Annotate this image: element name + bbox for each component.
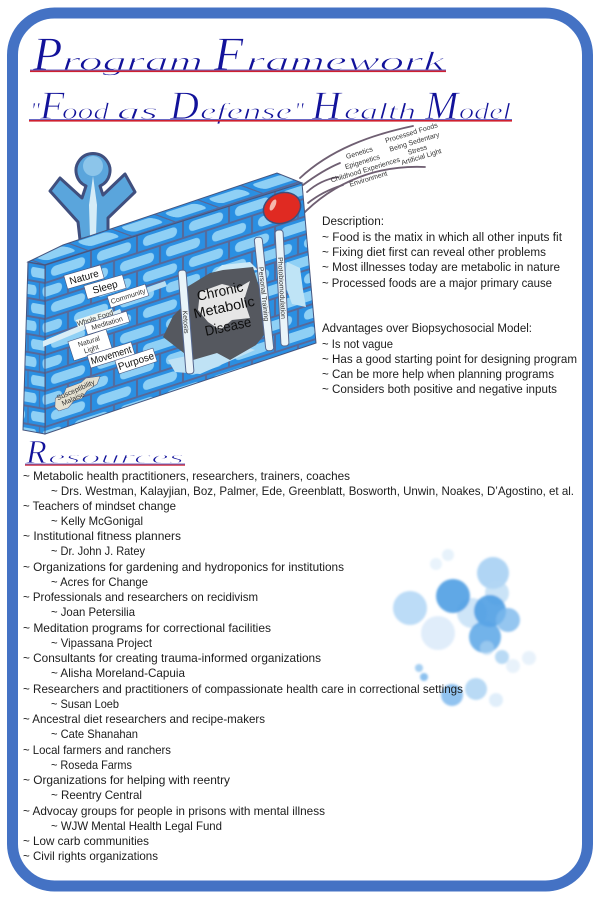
- text block: description: ~ Fixing diet first can reveal other problems: [322, 245, 546, 259]
- brick: Natural Light: [68, 329, 112, 361]
- brick: Whole Food: Whole Food: [76, 310, 114, 328]
- text block: resources list: ~ Teachers of mindset change: [23, 499, 176, 513]
- negative input labels: Childhood Experiences: [330, 157, 401, 184]
- bar: Photobiomodulation: Photobiomodulation: [276, 257, 286, 319]
- brick: Sleep: Sleep: [91, 279, 120, 297]
- title: Program Framework: [30, 28, 446, 81]
- brick: Meditation: [84, 311, 130, 335]
- text block: resources list: ~ Acres for Change: [51, 575, 148, 589]
- text block: resources list: ~ WJW Mental Health Legal Fund: [51, 819, 222, 833]
- label: Chronic Metabolic Disease: Chronic: [195, 278, 245, 304]
- heading: Resources: esources: [48, 448, 185, 467]
- brick: Community: [107, 284, 149, 308]
- text block: description: [322, 214, 563, 290]
- negative input labels: Stress: [407, 144, 429, 157]
- heading: Food as Defense Health Model: odel: [459, 99, 511, 124]
- heading: Food as Defense Health Model: D: [169, 83, 199, 128]
- text block: resources list: [23, 469, 574, 863]
- text block: resources list: ~ Vipassana Project: [51, 636, 153, 650]
- bar: Personal Training: [254, 237, 274, 351]
- text block: resources list: ~ Cate Shanahan: [51, 727, 138, 741]
- text block: advantages: Advantages over Biopsychosocial Model:: [322, 321, 532, 335]
- text block: description: ~ Processed foods are a major primary cause: [322, 276, 552, 290]
- text block: resources list: ~ Kelly McGonigal: [51, 514, 143, 528]
- title: Program Framework: ramework: [246, 47, 446, 76]
- text block: description: ~ Food is the matix in which all other inputs fit: [322, 230, 563, 244]
- bar: Photobiomodulation: [274, 230, 289, 346]
- heading: Food as Defense Health Model: efense: [200, 99, 292, 124]
- brick: Community: Community: [110, 288, 147, 306]
- brick: Movement: Movement: [90, 344, 133, 367]
- negative input labels: Artificial Light: [401, 148, 443, 167]
- brick: Meditation: Meditation: [91, 316, 124, 332]
- text block: description: Description:: [322, 214, 384, 228]
- text block: resources list: ~ Meditation programs for correctional facilities: [23, 621, 271, 635]
- text block: resources list: ~ Roseda Farms: [51, 758, 132, 772]
- patch: Susceptibility Malaise: [49, 372, 107, 413]
- text block: resources list: ~ Researchers and practitioners of compassionate health care in correctional settings: [23, 682, 463, 696]
- bar: Personal Training: Personal Training: [257, 267, 269, 322]
- text block: resources list: ~ Organizations for gardening and hydroponics for institutions: [23, 560, 344, 574]
- heading: Food as Defense Health Model: ": [294, 99, 305, 125]
- text block: resources list: ~ Institutional fitness planners: [23, 529, 181, 543]
- label: Chronic Metabolic Disease: Metabolic: [192, 293, 256, 321]
- text block: resources list: ~ Metabolic health practitioners, researchers, trainers, coaches: [23, 469, 350, 483]
- title: Program Framework: F: [213, 28, 244, 81]
- heading: Food as Defense Health Model: ealth: [344, 99, 416, 124]
- text block: resources list: ~ Organizations for helping with reentry: [23, 773, 230, 787]
- text block: resources list: ~ Alisha Moreland-Capuia: [51, 666, 185, 680]
- heading: Resources: R: [25, 434, 47, 471]
- wall lines: negative inputs: [300, 126, 425, 217]
- text block: resources list: ~ Local farmers and ranchers: [23, 743, 171, 757]
- negative input labels: Epigenetics: [344, 154, 381, 171]
- patch: Susceptibility Malaise: Susceptibility: [56, 379, 97, 402]
- label: Chronic Metabolic Disease: Disease: [203, 313, 253, 339]
- text block: resources list: ~ Drs. Westman, Kalayjian, Boz, Palmer, Ede, Greenblatt, Bosworth, Unwin, Noakes, D’Agostino, et al.: [51, 484, 574, 498]
- heading: Food as Defense Health Model: F: [39, 83, 65, 128]
- negative input labels: Environment: [349, 170, 388, 189]
- heading: Food as Defense Health Model: [29, 83, 512, 128]
- negative input labels: [330, 122, 443, 189]
- text block: advantages: ~ Has a good starting point for designing program: [322, 352, 577, 366]
- hole: chronic metabolic disease: [163, 267, 268, 360]
- text block: resources list: ~ Professionals and researchers on recidivism: [23, 590, 258, 604]
- text block: description: ~ Most illnesses today are metabolic in nature: [322, 260, 560, 274]
- text block: advantages: ~ Can be more help when planning programs: [322, 367, 554, 381]
- heading: Resources: [25, 434, 185, 471]
- negative input labels: Processed Foods: [384, 122, 439, 145]
- brick: Natural Light: Light: [83, 344, 100, 355]
- text block: resources list: ~ Ancestral diet researchers and recipe-makers: [23, 712, 265, 726]
- negative input labels: Genetics: [345, 146, 374, 161]
- bar: Ketosis: [177, 270, 194, 374]
- text block: resources list: ~ Consultants for creating trauma-informed organizations: [23, 651, 321, 665]
- brick: Nature: [64, 265, 104, 289]
- text block: resources list: ~ Reentry Central: [51, 788, 142, 802]
- brick: Nature: Nature: [68, 268, 101, 287]
- patch: Susceptibility Malaise: Malaise: [61, 391, 86, 408]
- heading: Food as Defense Health Model: M: [424, 83, 461, 128]
- text block: resources list: ~ Civil rights organizations: [23, 849, 158, 863]
- label: Chronic Metabolic Disease: [192, 278, 256, 339]
- text block: resources list: ~ Dr. John J. Ratey: [51, 544, 145, 558]
- title: Program Framework: rogram: [62, 47, 203, 76]
- negative input labels: Being Sedentary: [389, 132, 441, 153]
- text block: resources list: ~ Joan Petersilia: [51, 605, 135, 619]
- text block: resources list: ~ Advocay groups for people in prisons with mental illness: [23, 804, 325, 818]
- icon: person behind wall: [50, 154, 135, 240]
- text block: advantages: [322, 321, 577, 396]
- text block: resources list: ~ Low carb communities: [23, 834, 149, 848]
- brick: Sleep: [84, 275, 126, 299]
- icon: tomato: [259, 187, 305, 229]
- decorative bubbles: [393, 549, 536, 707]
- bar: Ketosis: Ketosis: [181, 310, 189, 334]
- text block: resources list: ~ Susan Loeb: [51, 697, 119, 711]
- heading: Food as Defense Health Model: H: [311, 83, 343, 128]
- illustration: brick wall model: [23, 122, 443, 434]
- brick: Natural Light: Natural: [77, 335, 101, 349]
- heading: Food as Defense Health Model: as: [117, 99, 158, 124]
- text block: advantages: ~ Considers both positive and negative inputs: [322, 382, 557, 396]
- brick: Purpose: Purpose: [117, 351, 156, 373]
- heading: Food as Defense Health Model: ": [30, 99, 41, 125]
- text block: advantages: ~ Is not vague: [322, 337, 393, 351]
- wall body: [23, 173, 316, 434]
- heading: Food as Defense Health Model: ood: [62, 99, 110, 124]
- title: Program Framework: P: [32, 28, 62, 81]
